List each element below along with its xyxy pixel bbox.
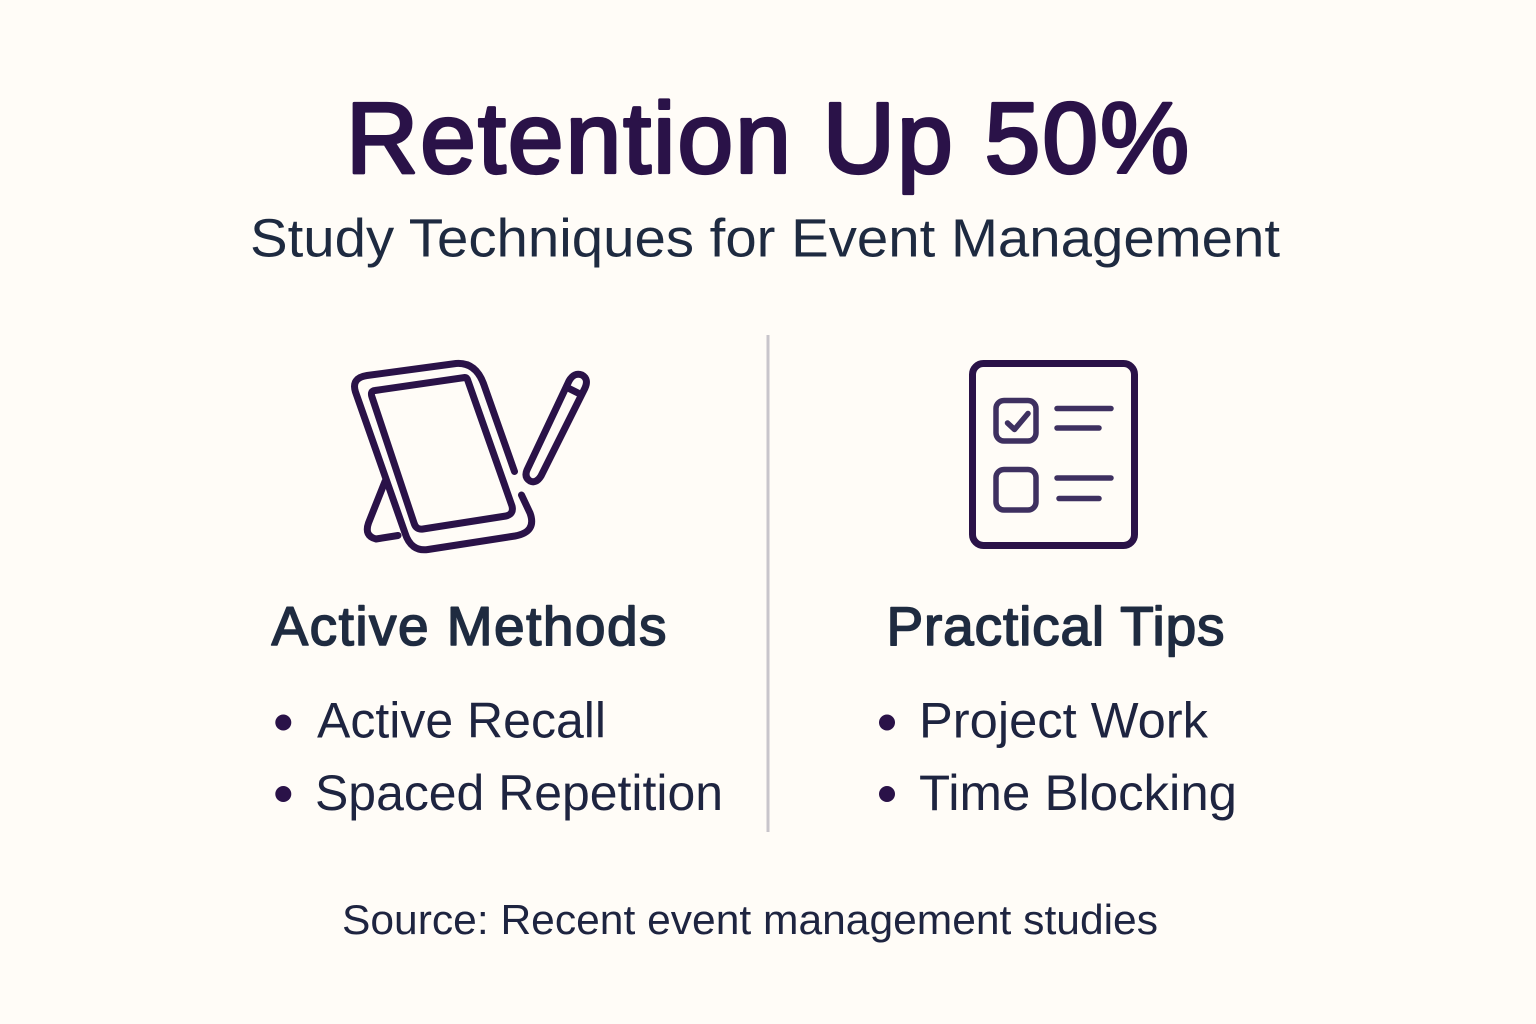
heading: practical tips: Practical Tips [886,595,1224,657]
bullet item: project work: Project Work [919,692,1209,748]
panel: active methods [272,363,723,821]
source note: Source: Recent event management studies [342,896,1158,943]
bullet item: active recall: Active Recall [317,692,606,748]
subtitle: Study Techniques for Event Management [250,208,1280,268]
icon: checklist [972,364,1134,546]
icon: tablet with stylus [355,363,586,550]
panel: practical tips [879,364,1237,821]
bullet item: spaced repetition: Spaced Repetition [315,765,723,821]
title: Retention Up 50% [346,82,1189,194]
heading: active methods: Active Methods [272,595,666,657]
bullet item: time blocking: Time Blocking [919,765,1237,821]
